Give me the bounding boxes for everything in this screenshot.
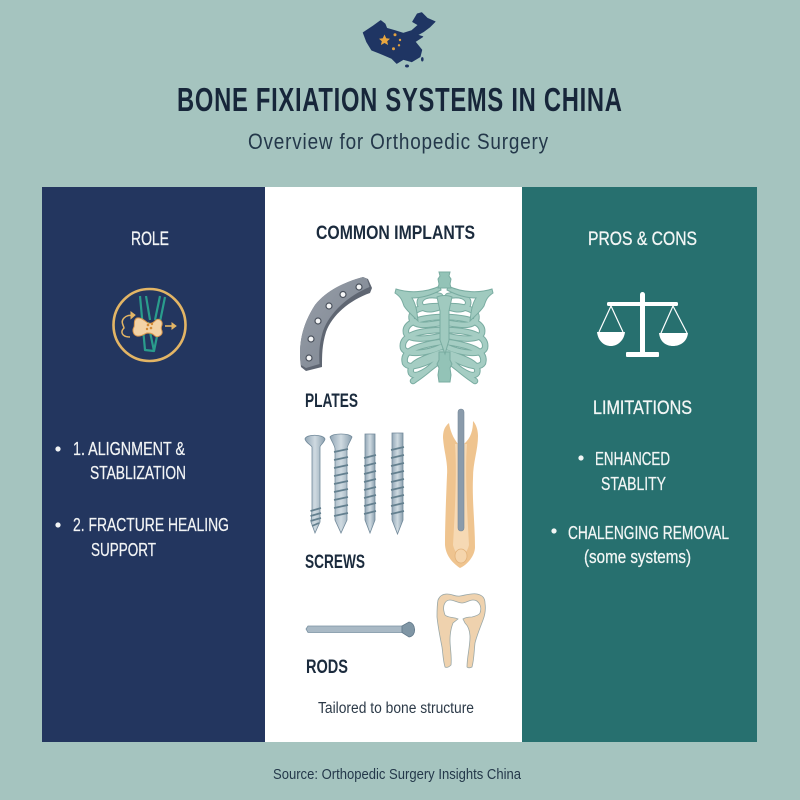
panel: role <box>42 187 265 742</box>
bullet text: fracture healing: SUPPORT <box>91 539 156 560</box>
icon: bone plate <box>300 277 372 371</box>
bullet text: fracture healing <box>56 514 229 560</box>
panel: pros and cons <box>522 187 757 742</box>
label: plates: PLATES <box>305 391 358 412</box>
icon: balance scale <box>597 292 688 357</box>
icon: large star <box>379 34 390 45</box>
bullet text: alignment <box>56 438 186 483</box>
heading: pros and cons: PROS & CONS <box>588 229 697 250</box>
bullet text: alignment: STABLIZATION <box>90 462 186 483</box>
icon: China map with stars <box>363 13 435 67</box>
heading: role: ROLE <box>131 229 169 250</box>
bullet text: fracture healing: 2. FRACTURE HEALING <box>73 514 229 535</box>
subtitle: Overview for Orthopedic Surgery <box>248 130 549 154</box>
icon: bone cross-section <box>437 594 485 668</box>
source note: Source: Orthopedic Surgery Insights China <box>273 766 522 783</box>
heading: common implants: COMMON IMPLANTS <box>316 222 475 244</box>
subheading: limitations: LIMITATIONS <box>593 398 692 419</box>
title: BONE FIXIATION SYSTEMS IN CHINA <box>177 82 622 119</box>
bullet text: challenging removal: CHALENGING REMOVAL <box>568 522 729 543</box>
bullet text: enhanced stability: STABLITY <box>601 473 666 494</box>
icon: rod <box>306 622 415 637</box>
caption: tailored: Tailored to bone structure <box>318 700 474 717</box>
icon: bone healing circle <box>114 289 186 361</box>
panel: common implants <box>265 187 522 742</box>
bullet text: alignment: 1. ALIGNMENT & <box>73 438 186 459</box>
bullet text: enhanced stability: ENHANCED <box>595 448 670 469</box>
icon: screws <box>305 433 404 534</box>
icon: intramedullary nail in bone <box>443 409 478 568</box>
label: screws: SCREWS <box>305 552 365 573</box>
label: rods: RODS <box>306 657 348 678</box>
bullet text: challenging removal: (some systems) <box>584 546 691 567</box>
icon: rib cage <box>395 272 493 382</box>
bullet text: challenging removal <box>552 522 729 567</box>
bullet text: enhanced stability <box>578 448 670 494</box>
